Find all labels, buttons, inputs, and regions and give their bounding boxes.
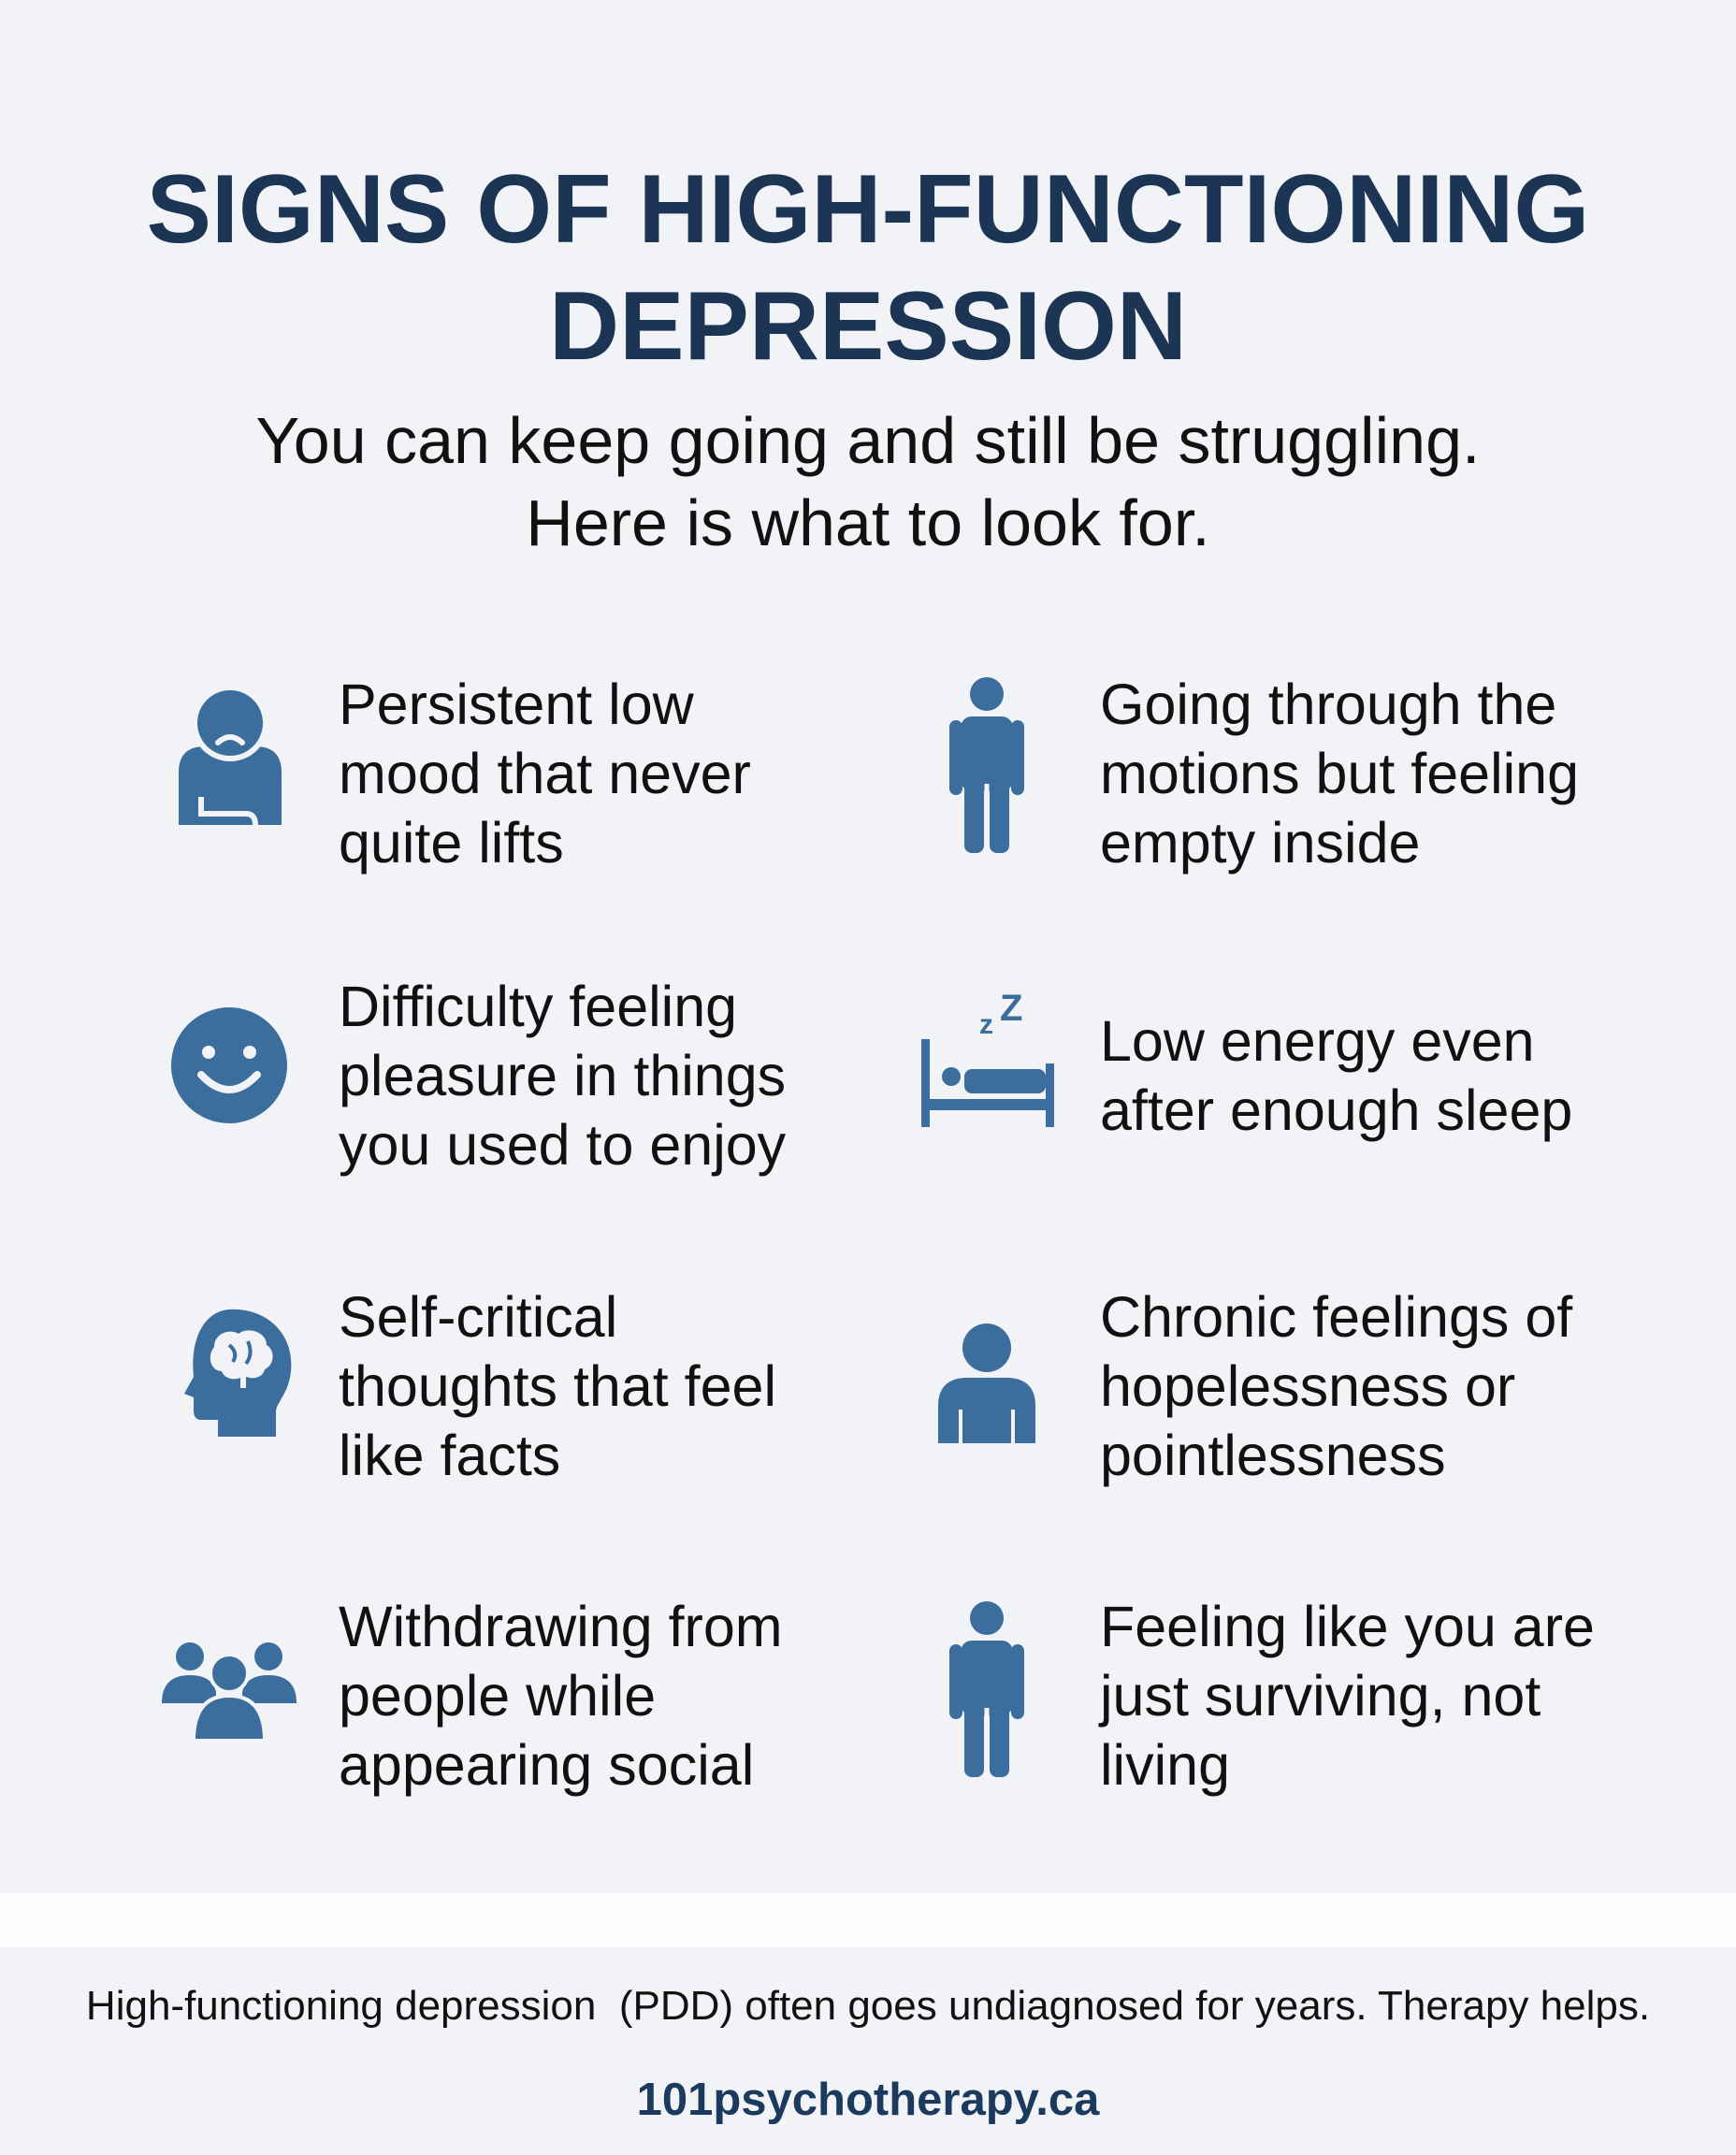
text: low mood xyxy=(339,673,751,875)
white band xyxy=(0,1893,1736,1947)
title xyxy=(147,155,1589,381)
text: surviving: living xyxy=(1100,1733,1230,1797)
text: pleasure: Difficulty feeling xyxy=(339,975,737,1038)
text: low mood: mood that never xyxy=(339,742,751,805)
footer url: 101psychotherapy.ca xyxy=(637,2075,1099,2125)
text: low mood: quite lifts xyxy=(339,811,564,875)
icon: standing person 1 xyxy=(949,677,1024,853)
subtitle: Here is what to look for. xyxy=(526,486,1210,559)
text: withdrawing: appearing social xyxy=(339,1733,754,1797)
text: withdrawing: Withdrawing from xyxy=(339,1595,783,1658)
footer note: High-functioning depression (PDD) often goes undiagnosed for years. Therapy helps. xyxy=(86,1983,1650,2029)
subtitle xyxy=(256,404,1480,559)
text: withdrawing: people while xyxy=(339,1664,656,1728)
text: surviving: just surviving, not xyxy=(1100,1664,1541,1728)
text: low mood: Persistent low xyxy=(339,673,694,736)
text: hopelessness: pointlessness xyxy=(1100,1424,1446,1487)
icon: sad person xyxy=(179,690,282,825)
text: low energy: after enough sleep xyxy=(1100,1078,1572,1142)
text: hopelessness: Chronic feelings of xyxy=(1100,1285,1572,1349)
text: hopelessness xyxy=(1100,1285,1573,1487)
text: low energy: Low energy even xyxy=(1100,1009,1535,1073)
subtitle: You can keep going and still be struggling. xyxy=(256,404,1480,477)
text: hopelessness: hopelessness or xyxy=(1100,1354,1515,1418)
text: going through motions: empty inside xyxy=(1100,811,1420,875)
text: self-critical: like facts xyxy=(339,1424,560,1487)
text: self-critical xyxy=(339,1285,776,1487)
icon: bed: Z xyxy=(1000,988,1022,1029)
text: pleasure: you used to enjoy xyxy=(339,1113,786,1177)
icon: standing person 2 xyxy=(949,1601,1024,1777)
icon: smiley xyxy=(171,1007,287,1123)
text: withdrawing xyxy=(339,1595,783,1797)
text: surviving: Feeling like you are xyxy=(1100,1595,1595,1658)
text: self-critical: Self-critical xyxy=(339,1285,617,1349)
text: low energy xyxy=(1100,1009,1572,1142)
text: surviving xyxy=(1098,1595,1595,1797)
title: DEPRESSION xyxy=(549,272,1187,381)
icon: bust person xyxy=(938,1323,1035,1443)
title: SIGNS OF HIGH-FUNCTIONING xyxy=(147,155,1589,264)
text: pleasure: pleasure in things xyxy=(339,1044,786,1107)
text: going through motions xyxy=(1100,673,1579,875)
text: pleasure xyxy=(339,975,786,1177)
text: going through motions: motions but feeling xyxy=(1100,742,1579,805)
icon: bed: z xyxy=(979,1009,993,1040)
text: going through motions: Going through the xyxy=(1100,673,1556,736)
icon: bed xyxy=(921,988,1054,1127)
icon: group of people xyxy=(162,1642,297,1739)
text: self-critical: thoughts that feel xyxy=(339,1354,776,1418)
icon: head with brain xyxy=(184,1309,292,1437)
